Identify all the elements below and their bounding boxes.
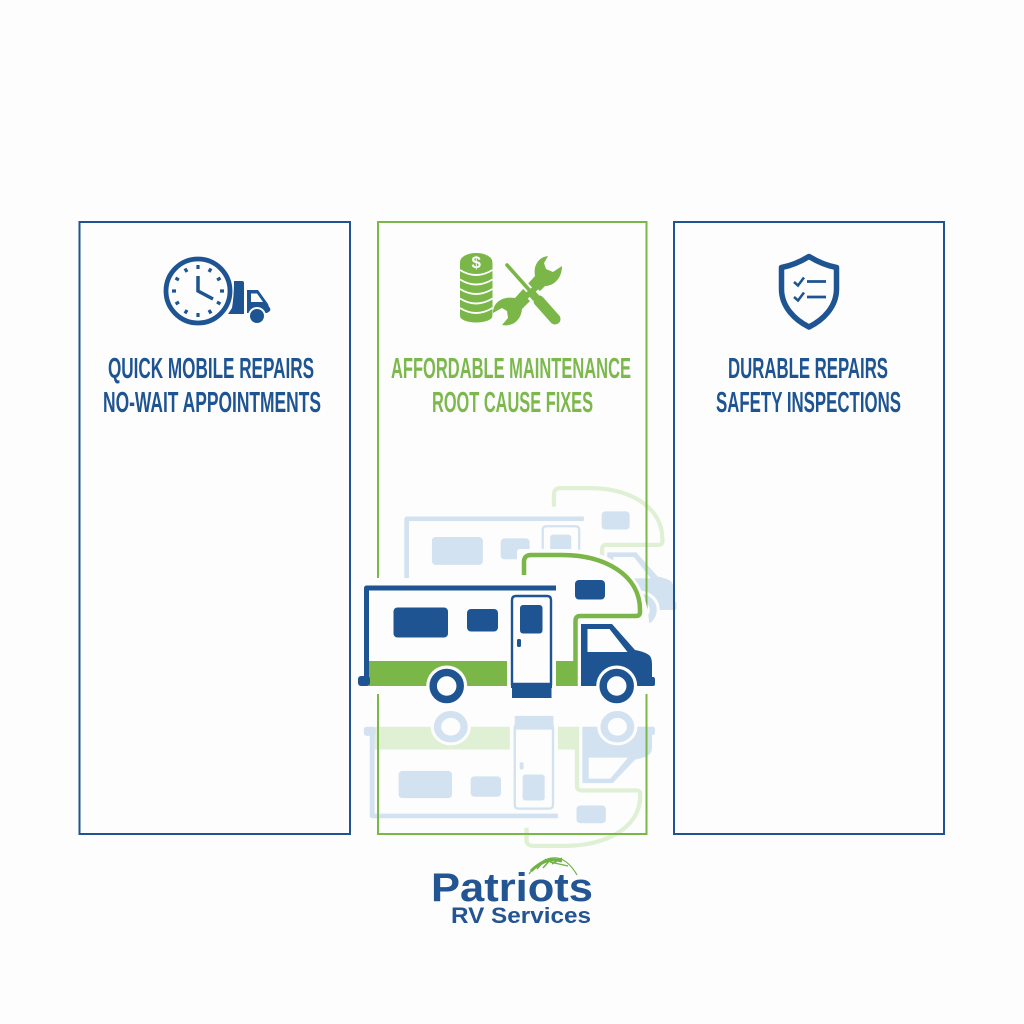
illustration: main RV [358,555,655,706]
white halo behind main RV [360,552,658,691]
logo: Patriots RV Services [431,858,593,928]
heading: durable repairs [716,353,901,419]
faded RV reflection below [364,708,655,846]
heading: affordable maintenance: ROOT CAUSE FIXES [432,387,593,419]
door [511,596,552,698]
green body band [369,661,577,686]
logo leaf arc [529,858,577,875]
truck cab [581,624,655,686]
rear wheel [426,666,467,706]
icon: shield checklist [782,256,836,327]
heading: quick repairs: NO-WAIT APPOINTMENTS [103,387,321,419]
logo wordmark: Patriots [431,866,593,910]
faded RV above [399,488,676,629]
logo subtitle: RV Services [451,903,591,928]
icon: coins and tools: $ [471,253,481,272]
panel: quick repairs [80,222,350,834]
roof and rear wall [366,588,556,685]
panel: durable repairs [674,222,944,834]
heading: affordable maintenance [391,353,631,419]
panel: affordable maintenance [378,222,646,834]
windows [394,580,605,638]
heading: quick repairs [103,353,321,419]
icon: coins and tools [460,253,562,325]
cab-over outline [524,555,640,686]
icon: clock and truck [166,259,270,325]
heading: affordable maintenance: AFFORDABLE MAINTENANCE [391,353,631,385]
heading: quick repairs: QUICK MOBILE REPAIRS [108,353,314,385]
front wheel [596,666,637,706]
rear bumper [358,676,370,686]
heading: durable repairs: DURABLE REPAIRS [728,353,888,385]
